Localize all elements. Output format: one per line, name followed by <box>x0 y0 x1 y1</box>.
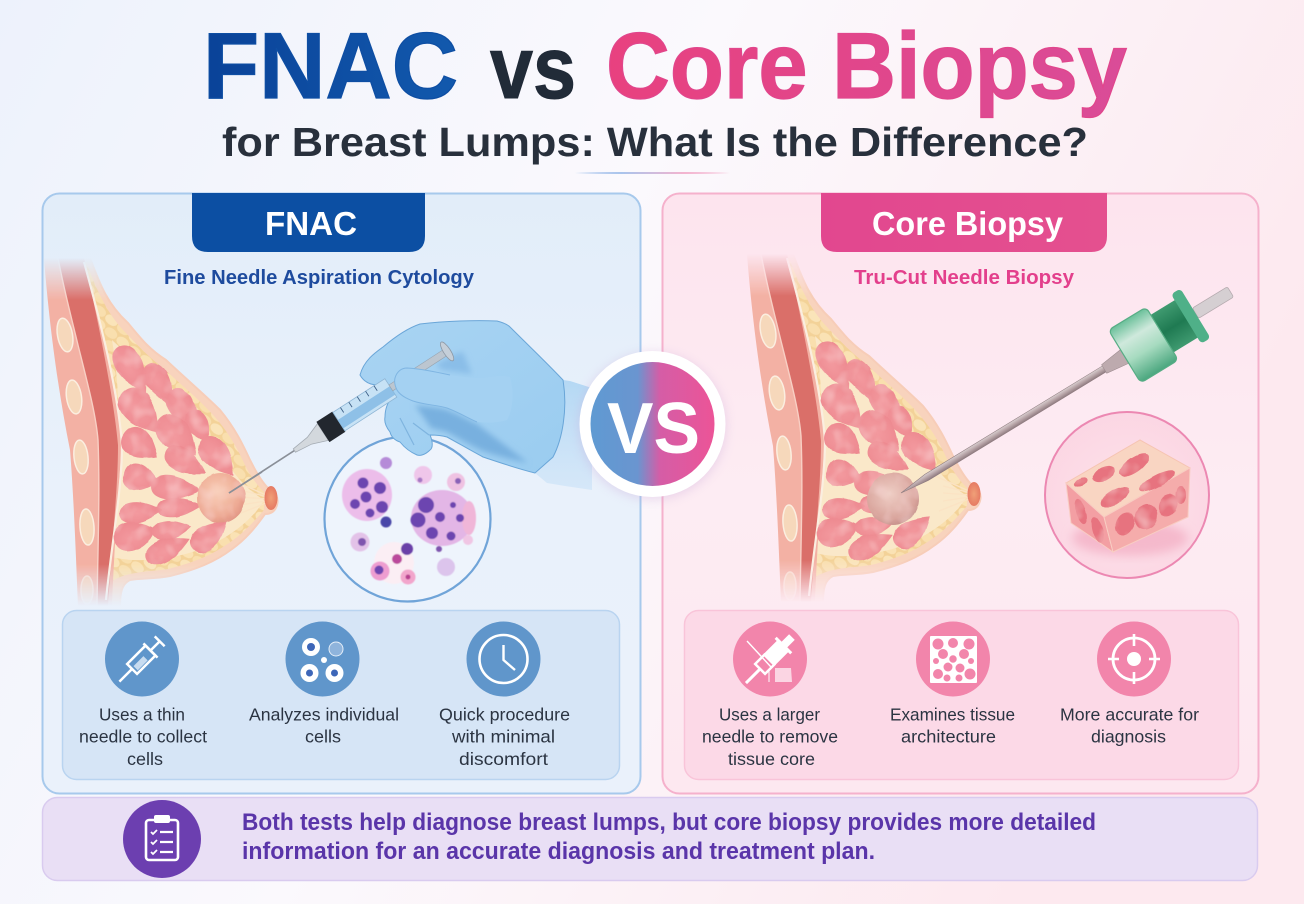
feature: larger needle <box>702 622 838 769</box>
VS badge <box>578 351 726 500</box>
summary text: information for an accurate diagnosis and treatment plan. <box>242 838 875 865</box>
thumb <box>395 368 513 423</box>
panel background: FNAC <box>42 194 640 794</box>
text: quick procedure: with minimal <box>451 726 555 746</box>
icon: cells <box>286 622 360 696</box>
tissue block <box>1066 440 1190 556</box>
feature: individual cells <box>249 622 399 746</box>
core biopsy needle <box>885 265 1247 519</box>
text: tissue architecture: Examines tissue <box>890 704 1015 724</box>
summary text: Both tests help diagnose breast lumps, but core biopsy provides more detailed <box>242 809 1096 836</box>
tab heading: FNAC: FNAC <box>265 205 357 242</box>
feature: thin needle <box>79 622 207 769</box>
text: tissue architecture: architecture <box>901 726 996 746</box>
tissue core circle <box>1045 412 1209 578</box>
title: FNAC <box>203 13 458 118</box>
cytology circle with cells <box>324 436 490 602</box>
text: quick procedure: Quick procedure <box>439 704 570 724</box>
needle tip in lump <box>229 472 262 493</box>
text: thin needle: needle to collect <box>79 726 207 746</box>
text: thin needle: Uses a thin <box>99 704 185 724</box>
tumour lump <box>867 473 919 525</box>
subheading: Fine Needle Aspiration Cytology: Fine Needle Aspiration Cytology <box>164 267 475 289</box>
tumour lump <box>197 473 245 523</box>
feature: accurate diagnosis <box>1060 622 1199 746</box>
icon: syringe <box>105 622 179 696</box>
icon: tissue architecture <box>916 622 990 696</box>
text: accurate diagnosis: diagnosis <box>1091 726 1166 746</box>
summary banner <box>42 798 1258 880</box>
icon: clipboard checklist <box>123 800 201 878</box>
illustration: breast anatomy with lump <box>747 254 981 602</box>
VS badge: VS <box>607 389 700 469</box>
subheading: Tru-Cut Needle Biopsy: Tru-Cut Needle Biopsy <box>854 267 1075 289</box>
panel: Core Biopsy <box>662 193 1258 794</box>
text: larger needle: Uses a larger <box>719 704 820 724</box>
syringe <box>222 339 457 503</box>
feature: tissue architecture <box>890 622 1015 746</box>
text: quick procedure: discomfort <box>459 749 548 769</box>
title: vs <box>490 18 576 117</box>
tab heading: Core Biopsy: Core Biopsy <box>872 205 1064 242</box>
text: accurate diagnosis: More accurate for <box>1060 704 1199 724</box>
features strip: Core Biopsy <box>684 610 1238 780</box>
illustration: breast anatomy with lump <box>44 258 278 606</box>
icon: clock <box>466 622 540 696</box>
text: individual cells: cells <box>305 726 341 746</box>
text: larger needle: needle to remove <box>702 726 838 746</box>
features strip: FNAC <box>62 610 620 780</box>
gloved hand holding syringe <box>222 321 592 503</box>
title <box>203 13 1127 118</box>
panel: FNAC <box>42 193 640 794</box>
text: larger needle: tissue core <box>728 749 815 769</box>
icon: larger needle <box>733 622 807 696</box>
tab heading: FNAC <box>192 193 425 252</box>
panel background: Core Biopsy <box>662 194 1258 794</box>
feature: quick procedure <box>439 622 570 769</box>
title: Core Biopsy <box>606 13 1127 118</box>
text: thin needle: cells <box>127 749 163 769</box>
subtitle: for Breast Lumps: What Is the Difference? <box>222 119 1088 165</box>
text: individual cells: Analyzes individual <box>249 704 399 724</box>
tab heading: Core Biopsy <box>821 193 1107 252</box>
icon: target <box>1097 622 1171 696</box>
